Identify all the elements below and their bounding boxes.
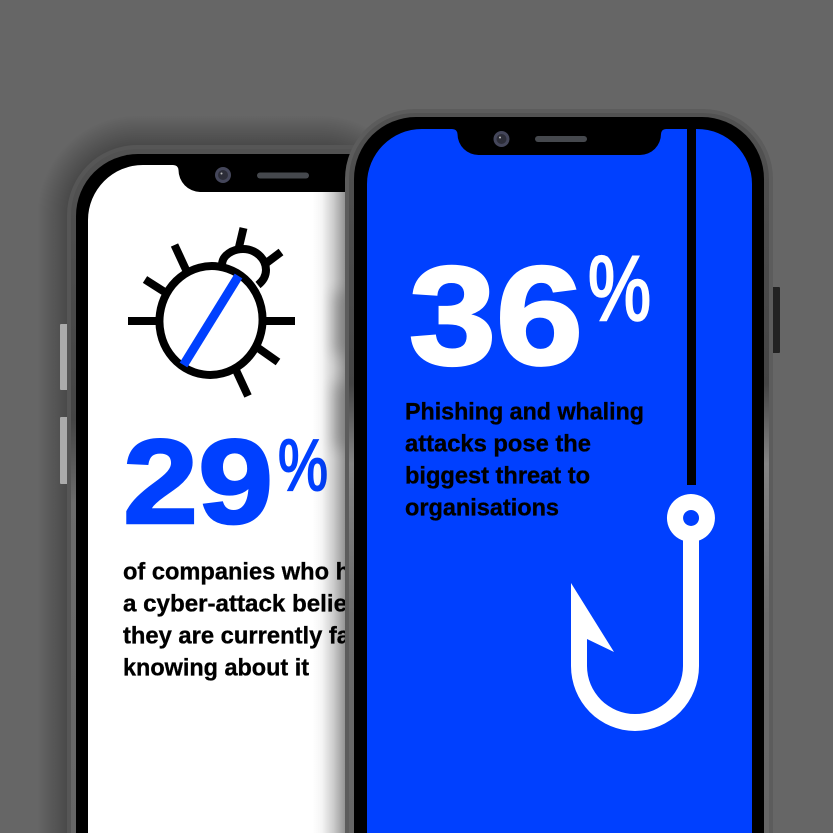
icon: back phone camera [215,167,231,183]
icon: left side button lower [60,417,68,484]
text: back phone description: a cyber-attack belie [123,590,347,618]
phone: front (blue screen) [345,109,780,833]
front phone outer frame [345,109,773,833]
back phone outer frame [67,145,400,833]
icon: fishing line [687,125,696,485]
text: front phone description [405,398,644,522]
text: back phone description: knowing about it [123,654,309,682]
stat: 29 percent: 29 [123,415,273,549]
icon: fish hook [571,494,715,731]
back phone black bezel [76,154,400,833]
text: back phone description: of companies who h [123,558,350,586]
icon: back phone speaker [257,172,309,178]
text: front phone description: biggest threat to [405,462,590,490]
stat: 29 percent: % [278,426,328,506]
stat: 36 percent: 36 [409,239,583,394]
front phone blue screen [367,129,752,833]
icon: left side button upper [60,324,68,390]
shadow of front phone on back phone [320,192,345,833]
text: back phone description [123,558,351,682]
text: front phone description: attacks pose the [405,430,591,458]
text: back phone description: they are currently fa [123,622,351,650]
text: front phone description: organisations [405,494,559,522]
icon: bug [128,228,295,396]
icon: front phone speaker [535,136,587,142]
icon: right side button [772,287,780,353]
phone: back (white screen) [37,115,420,833]
icon: front phone camera [494,131,510,147]
text: front phone description: Phishing and whaling [405,398,644,426]
back phone white screen [88,165,400,833]
stat: 36 percent: % [588,238,651,340]
front phone black bezel [354,117,764,833]
